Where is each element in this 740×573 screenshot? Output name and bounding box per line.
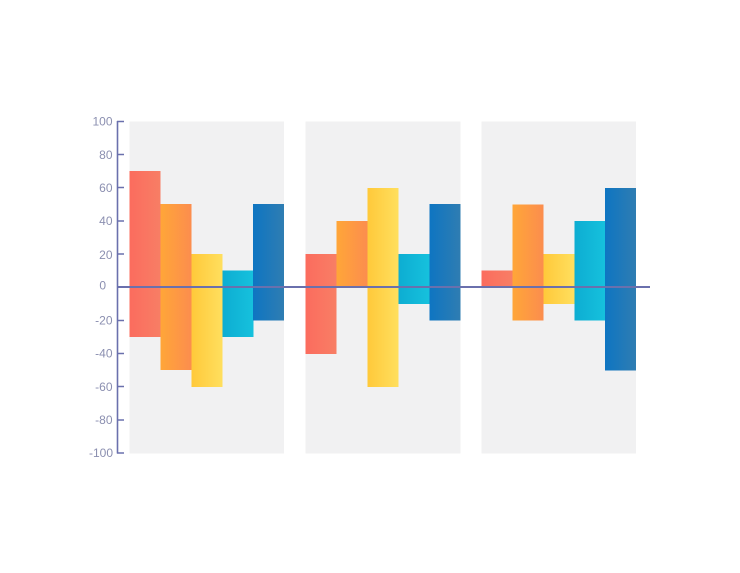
- y axis labels: 20: [99, 248, 113, 262]
- panel: group 1 background: [130, 122, 284, 454]
- bars: group 1: [130, 171, 284, 387]
- y axis labels: 60: [99, 181, 113, 195]
- zero baseline: [117, 286, 650, 288]
- y axis labels: 100: [92, 114, 113, 128]
- y axis labels: -80: [95, 413, 113, 427]
- y axis labels: 0: [99, 278, 106, 292]
- panel: group 3 background: [482, 122, 636, 454]
- y axis labels: -100: [89, 446, 113, 460]
- y axis labels: 40: [99, 214, 113, 228]
- bars: group 3: [482, 188, 636, 370]
- y axis labels: -60: [95, 380, 113, 394]
- y axis with ticks: [117, 121, 124, 454]
- y axis labels: -20: [95, 314, 113, 328]
- y axis labels: [89, 114, 113, 460]
- panel: group 2 background: [306, 122, 460, 454]
- y axis labels: 80: [99, 148, 113, 162]
- bars: group 2: [306, 188, 460, 387]
- y axis labels: -40: [95, 346, 113, 360]
